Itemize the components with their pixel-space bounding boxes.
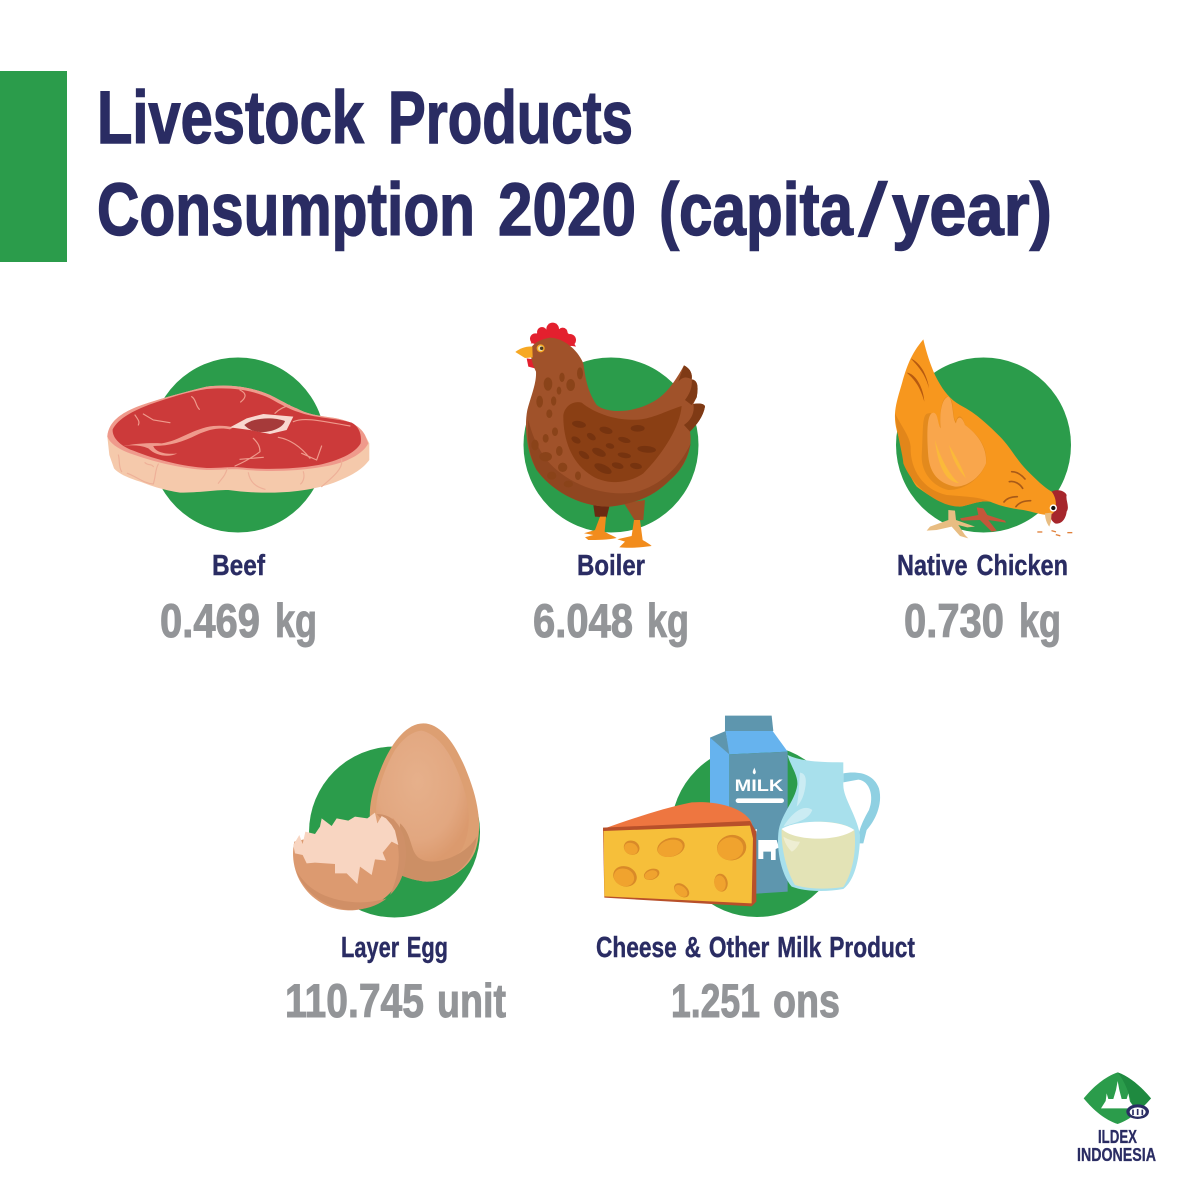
- label: layer egg: Layer Egg: [341, 932, 448, 964]
- value: native chicken: kg: [1019, 594, 1061, 647]
- accent bar: [0, 71, 67, 262]
- value: boiler: kg: [647, 594, 689, 647]
- title: Consumption: [97, 168, 475, 251]
- value: cheese and milk: 1.251: [671, 974, 760, 1027]
- green circle: native chicken: [896, 358, 1071, 532]
- milk carton: MILK: [735, 776, 783, 795]
- label: cheese and milk: Cheese & Other Milk Product: [596, 932, 915, 964]
- panel: native chicken: [895, 339, 1072, 647]
- green circle: beef: [150, 358, 326, 532]
- title: Livestock: [97, 76, 365, 159]
- cheese wedge: [603, 802, 756, 906]
- milk jug: [778, 755, 880, 891]
- icon: milk carton, cheese and jug: [603, 716, 880, 906]
- milk carton: [710, 716, 788, 894]
- value: layer egg: 110.745: [285, 974, 424, 1027]
- green circle: layer egg: [309, 746, 480, 918]
- value: cheese and milk: ons: [773, 974, 840, 1027]
- title: /: [855, 168, 890, 251]
- panel: boiler: [515, 323, 705, 647]
- logo mark: [1084, 1072, 1151, 1124]
- logo text: INDONESIA: [1077, 1144, 1156, 1165]
- value: boiler: 6.048: [533, 594, 633, 647]
- panel: layer egg: [285, 723, 506, 1027]
- panel: beef: [107, 358, 369, 647]
- green circle: boiler: [524, 358, 698, 532]
- icon: pecking orange hen: [895, 339, 1072, 538]
- value: native chicken: 0.730: [904, 594, 1004, 647]
- value: beef: 0.469: [160, 594, 260, 647]
- label: native chicken: Native Chicken: [897, 550, 1068, 582]
- logo: ILDEX Indonesia: [1077, 1072, 1156, 1165]
- title: year): [892, 168, 1052, 251]
- value: cheese and milk: [671, 974, 840, 1027]
- comb: [530, 323, 576, 347]
- icon: beef steak: [107, 386, 369, 493]
- green circle: cheese and milk: [671, 745, 843, 917]
- icon: egg and broken shell: [293, 723, 479, 910]
- title: [97, 76, 1052, 251]
- panel: cheese and milk: [596, 716, 915, 1027]
- logo text: ILDEX: [1098, 1126, 1137, 1147]
- icon: brown hen: [515, 323, 705, 548]
- title: Products: [388, 76, 633, 159]
- label: beef: Beef: [212, 550, 265, 582]
- title: 2020: [498, 168, 636, 251]
- label: boiler: Boiler: [577, 550, 645, 582]
- value: beef: kg: [275, 594, 317, 647]
- title: (capita: [659, 168, 854, 251]
- logo text: [1077, 1126, 1156, 1165]
- value: layer egg: unit: [437, 974, 506, 1027]
